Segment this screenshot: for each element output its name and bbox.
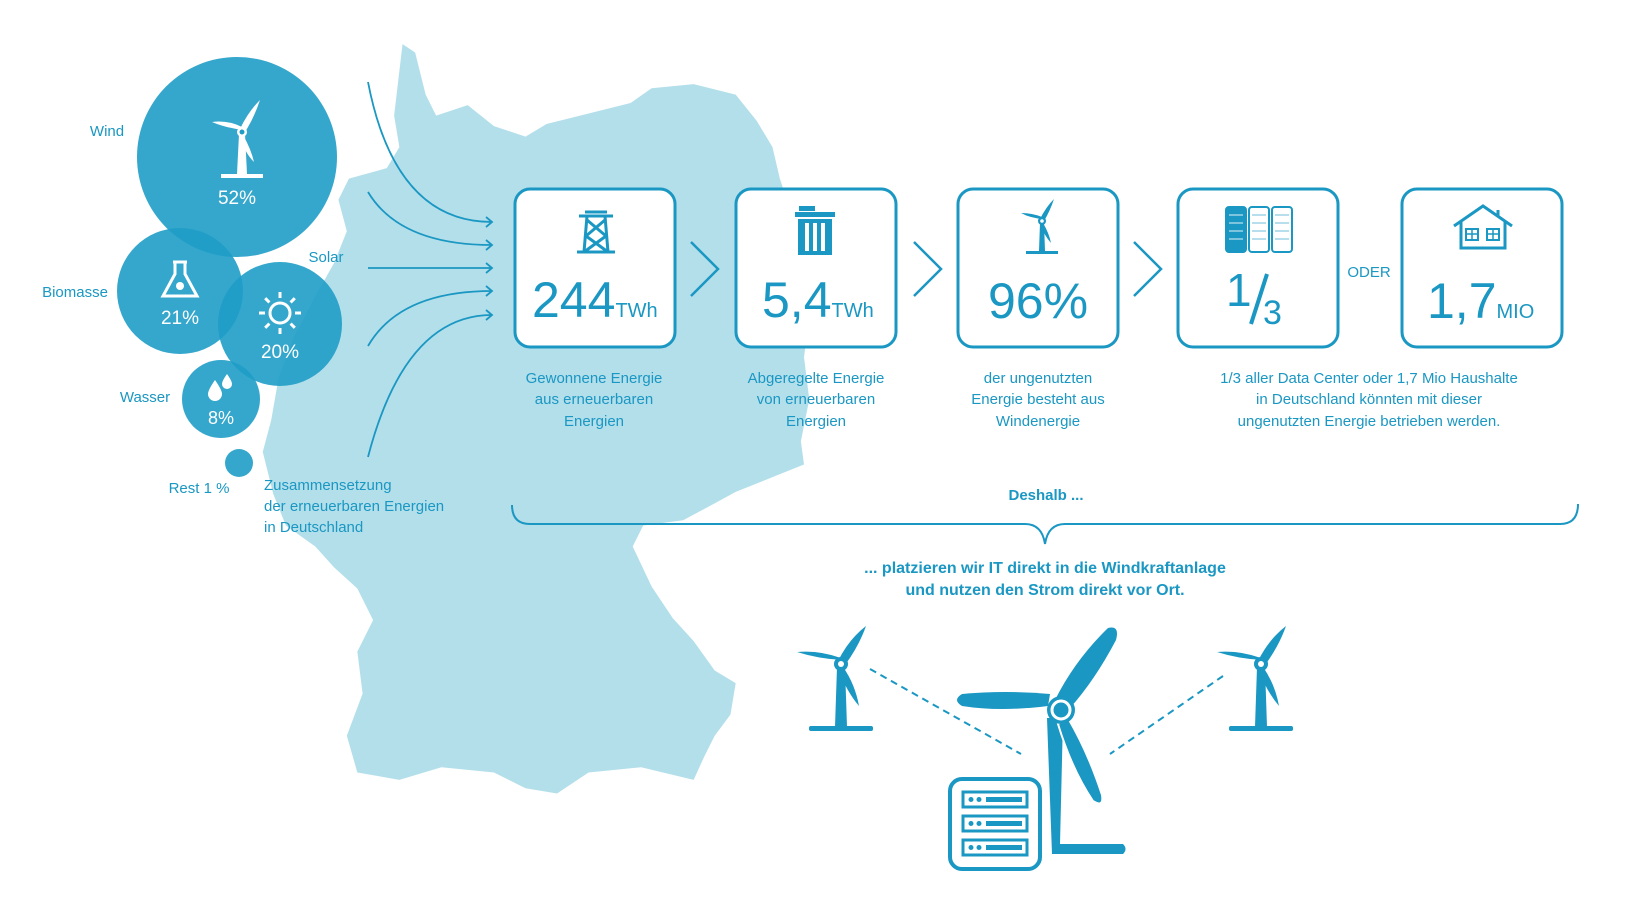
box: 96% bbox=[958, 189, 1118, 347]
icon: server racks bbox=[1226, 207, 1292, 252]
caption: boxes 4 and 5: in Deutschland könnten mit dieser bbox=[1256, 391, 1482, 408]
caption: boxes 4 and 5: ungenutzten Energie betrieben werden. bbox=[1238, 413, 1500, 430]
caption: box 2 bbox=[748, 370, 884, 430]
value: 8%: 8% bbox=[208, 408, 234, 428]
caption: box 3: Energie besteht aus bbox=[971, 391, 1105, 408]
icon: drops bbox=[208, 374, 232, 401]
caption: Zusammensetzung: Zusammensetzung bbox=[264, 477, 392, 494]
box: 244 TWh bbox=[515, 189, 675, 347]
value: 20%: 20% bbox=[261, 342, 299, 363]
arrow: chevron 3 bbox=[1134, 242, 1161, 296]
caption: box 3 bbox=[971, 370, 1105, 430]
value: 5,4 TWh: 5,4TWh bbox=[762, 272, 874, 328]
labels: energy sources: Wasser bbox=[120, 389, 170, 406]
caption: box 1: Energien bbox=[564, 413, 624, 430]
caption: box 1: aus erneuerbaren bbox=[535, 391, 653, 408]
value: 244 TWh: 244TWh bbox=[532, 272, 658, 328]
circle: Wasser bbox=[182, 360, 260, 438]
icon: big turbine bbox=[957, 628, 1126, 854]
caption: Zusammensetzung: der erneuerbaren Energien bbox=[264, 498, 444, 515]
text: conclusion: und nutzen den Strom direkt vor Ort. bbox=[905, 582, 1185, 599]
labels: energy sources: Rest 1 % bbox=[169, 480, 229, 497]
icon: server box bbox=[950, 779, 1040, 869]
circle: Wind bbox=[137, 57, 337, 257]
icon: power pylon bbox=[577, 212, 615, 252]
brace bbox=[512, 504, 1578, 544]
value: 1/3 bbox=[1226, 264, 1282, 332]
value: 96%: 96% bbox=[988, 273, 1088, 329]
arrows: converging bbox=[368, 82, 492, 457]
value: 52%: 52% bbox=[218, 188, 256, 209]
box: 1,7 MIO bbox=[1402, 189, 1562, 347]
icon: flask bbox=[163, 262, 197, 296]
arrow: chevron 1 bbox=[691, 242, 718, 296]
value: 21%: 21% bbox=[161, 308, 199, 329]
arrow: chevron 2 bbox=[914, 242, 941, 296]
circle: Rest bbox=[225, 449, 253, 477]
box: 5,4 TWh bbox=[736, 189, 896, 347]
value: 1/3: 1 bbox=[1226, 264, 1252, 316]
text: ODER: ODER bbox=[1347, 264, 1391, 281]
dashed connections bbox=[870, 669, 1223, 754]
icon: right turbine bbox=[1217, 626, 1293, 731]
text: conclusion: ... platzieren wir IT direkt in die Windkraftanlage bbox=[864, 560, 1226, 577]
circle: Biomasse bbox=[117, 228, 243, 354]
icon: sun bbox=[259, 292, 301, 334]
circle: Solar bbox=[218, 262, 342, 386]
caption: box 1: Gewonnene Energie bbox=[526, 370, 662, 387]
icon: wind turbine bbox=[212, 100, 263, 178]
text: Deshalb: Deshalb ... bbox=[1008, 487, 1084, 504]
value: 1/3: 3 bbox=[1263, 294, 1282, 332]
icon: trash can bbox=[795, 206, 835, 255]
caption: box 2: Abgeregelte Energie bbox=[748, 370, 884, 387]
labels: energy sources: Solar bbox=[308, 249, 344, 266]
labels: energy sources bbox=[42, 123, 344, 497]
labels: energy sources: Wind bbox=[90, 123, 124, 140]
caption: box 1 bbox=[526, 370, 662, 430]
caption: Zusammensetzung bbox=[264, 477, 444, 536]
icon: house bbox=[1454, 206, 1512, 248]
value: 1,7 MIO: 1,7MIO bbox=[1427, 273, 1534, 329]
caption: Zusammensetzung: in Deutschland bbox=[264, 519, 363, 536]
icon: left turbine bbox=[797, 626, 873, 731]
text: conclusion bbox=[864, 560, 1226, 599]
caption: box 3: Windenergie bbox=[996, 413, 1080, 430]
caption: box 3: der ungenutzten bbox=[984, 370, 1092, 387]
caption: boxes 4 and 5: 1/3 aller Data Center oder 1,7 Mio Haushalte bbox=[1220, 370, 1518, 387]
map: Germany bbox=[263, 44, 809, 794]
caption: box 2: Energien bbox=[786, 413, 846, 430]
caption: boxes 4 and 5 bbox=[1220, 370, 1518, 430]
box: 1/3 bbox=[1178, 189, 1338, 347]
icon: small turbine bbox=[1021, 199, 1058, 254]
labels: energy sources: Biomasse bbox=[42, 284, 108, 301]
caption: box 2: von erneuerbaren bbox=[757, 391, 875, 408]
